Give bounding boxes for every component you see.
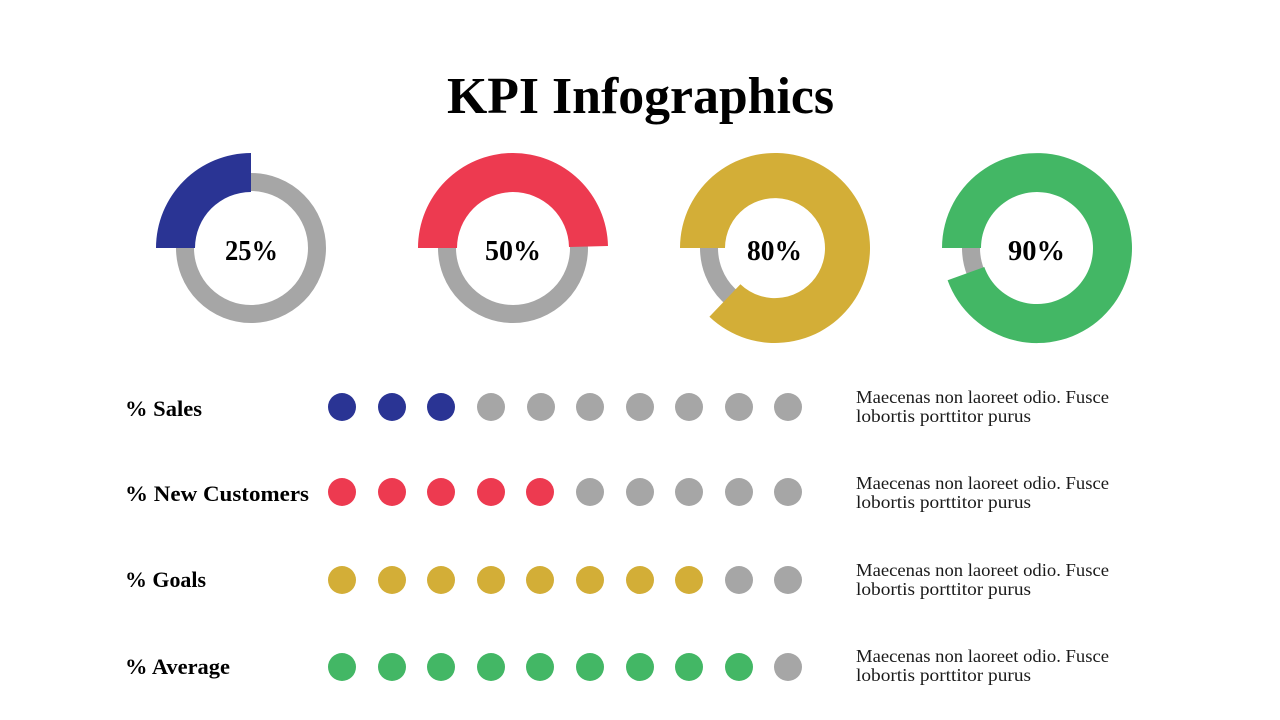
donut: 25% sales: 25% [225,236,278,267]
donut: 90% average [942,153,1132,343]
description: sales: Maecenas non laoreet odio. Fusce [856,387,1109,407]
donut: 50% new customers: 50% [485,236,541,267]
description: new customers: lobortis porttitor purus [856,492,1031,512]
dots: average 9 of 10 [328,653,802,681]
description: new customers [856,473,1109,512]
title: KPI Infographics [447,68,834,125]
donut: 25% sales [156,153,317,314]
description: average [856,646,1109,685]
description: sales [856,387,1109,426]
dots: sales 3 of 10 [328,393,802,421]
row: sales [125,387,1109,426]
description: average: Maecenas non laoreet odio. Fusce [856,646,1109,666]
donut: 90% average: 90% [1008,236,1065,267]
dots: new customers 5 of 10 [328,478,802,506]
donut: 80% goals: 80% [747,236,802,267]
donut: 50% new customers [418,153,608,314]
row: new customers [125,473,1109,512]
description: goals: lobortis porttitor purus [856,579,1031,599]
label: average: % Average [125,654,230,679]
description: goals: Maecenas non laoreet odio. Fusce [856,560,1109,580]
row: average [125,646,1109,685]
dots: goals 8 of 10 [328,566,802,594]
label: new customers: % New Customers [125,481,309,506]
description: goals [856,560,1109,599]
description: average: lobortis porttitor purus [856,665,1031,685]
description: sales: lobortis porttitor purus [856,406,1031,426]
donut: 80% goals [680,153,870,343]
description: new customers: Maecenas non laoreet odio. Fusce [856,473,1109,493]
row: goals [125,560,1109,599]
label: sales: % Sales [125,396,202,421]
label: goals: % Goals [125,567,206,592]
